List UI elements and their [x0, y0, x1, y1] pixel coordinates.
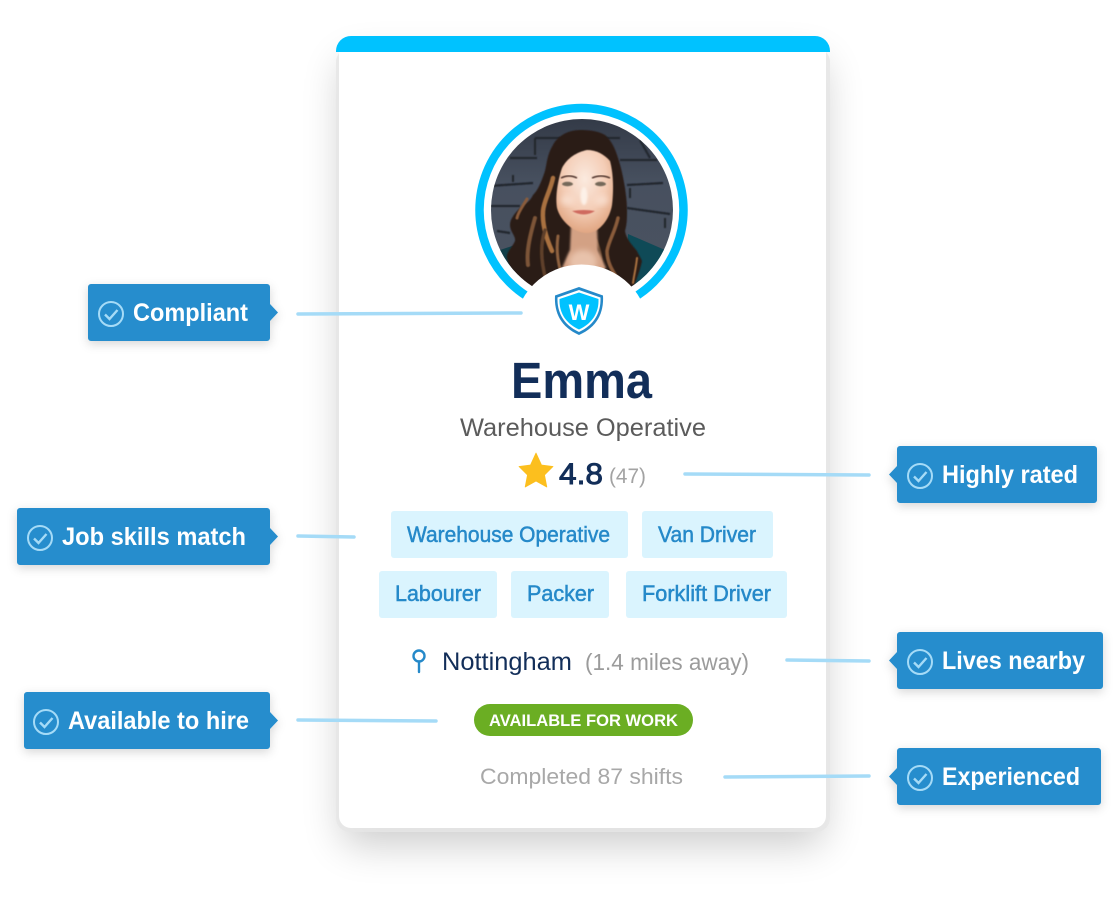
tag: warehouse operative: Warehouse Operative [407, 522, 610, 547]
tag: packer [511, 571, 609, 618]
connector: lives nearby [787, 660, 869, 661]
rating [519, 453, 646, 491]
tag: forklift driver: Forklift Driver [642, 581, 771, 606]
icon: pin [414, 650, 424, 672]
rating score: 4.8 [559, 458, 603, 491]
callout: compliant [88, 284, 278, 341]
brows [561, 176, 610, 178]
skill tags [379, 511, 787, 618]
callout: lives nearby [889, 632, 1103, 689]
lips [572, 210, 595, 214]
text: job title: Warehouse Operative [460, 414, 706, 442]
icon: check [28, 526, 52, 550]
location distance: (1.4 miles away) [585, 649, 749, 675]
callout: highly rated [889, 446, 1097, 503]
connector: job skills [298, 536, 354, 537]
heading: name: Emma [511, 352, 653, 409]
callout: lives nearby: Lives nearby [942, 647, 1085, 675]
callout: available to hire: Available to hire [68, 707, 249, 735]
callout: job skills match: Job skills match [62, 523, 246, 551]
icon: star [519, 453, 553, 487]
icon: check [908, 650, 932, 674]
callout: experienced: Experienced [942, 763, 1080, 791]
shield letter: W [569, 300, 590, 325]
availability badge: AVAILABLE FOR WORK [489, 711, 679, 730]
face [556, 150, 613, 233]
callout: available to hire [24, 692, 278, 749]
connector: available [298, 720, 436, 721]
eyes [562, 182, 573, 186]
location name: Nottingham [442, 648, 572, 676]
tag: labourer: Labourer [395, 581, 481, 606]
callout: experienced [889, 748, 1101, 805]
connector: compliant [298, 313, 521, 314]
tag: warehouse operative [391, 511, 628, 558]
tag: forklift driver [626, 571, 787, 618]
hair [507, 130, 642, 300]
tag: van driver [642, 511, 773, 558]
icon: shield badge [555, 287, 603, 335]
availability badge [474, 704, 693, 736]
neck and chest [561, 226, 608, 270]
tag: van driver: Van Driver [658, 522, 756, 547]
icon: check [908, 766, 932, 790]
avatar badge cutout [514, 264, 649, 400]
callout: job skills match [17, 508, 278, 565]
callout: highly rated: Highly rated [942, 461, 1078, 489]
panel: profile card [336, 36, 830, 845]
icon: check [34, 710, 58, 734]
text: completed shifts: Completed 87 shifts [480, 764, 683, 789]
connector: highly rated [685, 474, 869, 475]
jacket [628, 234, 664, 286]
icon: check [99, 302, 123, 326]
avatar [475, 104, 688, 299]
avatar ring [480, 108, 684, 312]
tag: packer: Packer [527, 581, 594, 606]
tag: labourer [379, 571, 497, 618]
photo [491, 119, 673, 286]
location [414, 648, 749, 676]
callout: compliant: Compliant [133, 299, 249, 327]
rating count: (47) [609, 465, 646, 488]
connector: experienced [725, 776, 869, 777]
icon: check [908, 464, 932, 488]
card top bar [336, 36, 830, 52]
